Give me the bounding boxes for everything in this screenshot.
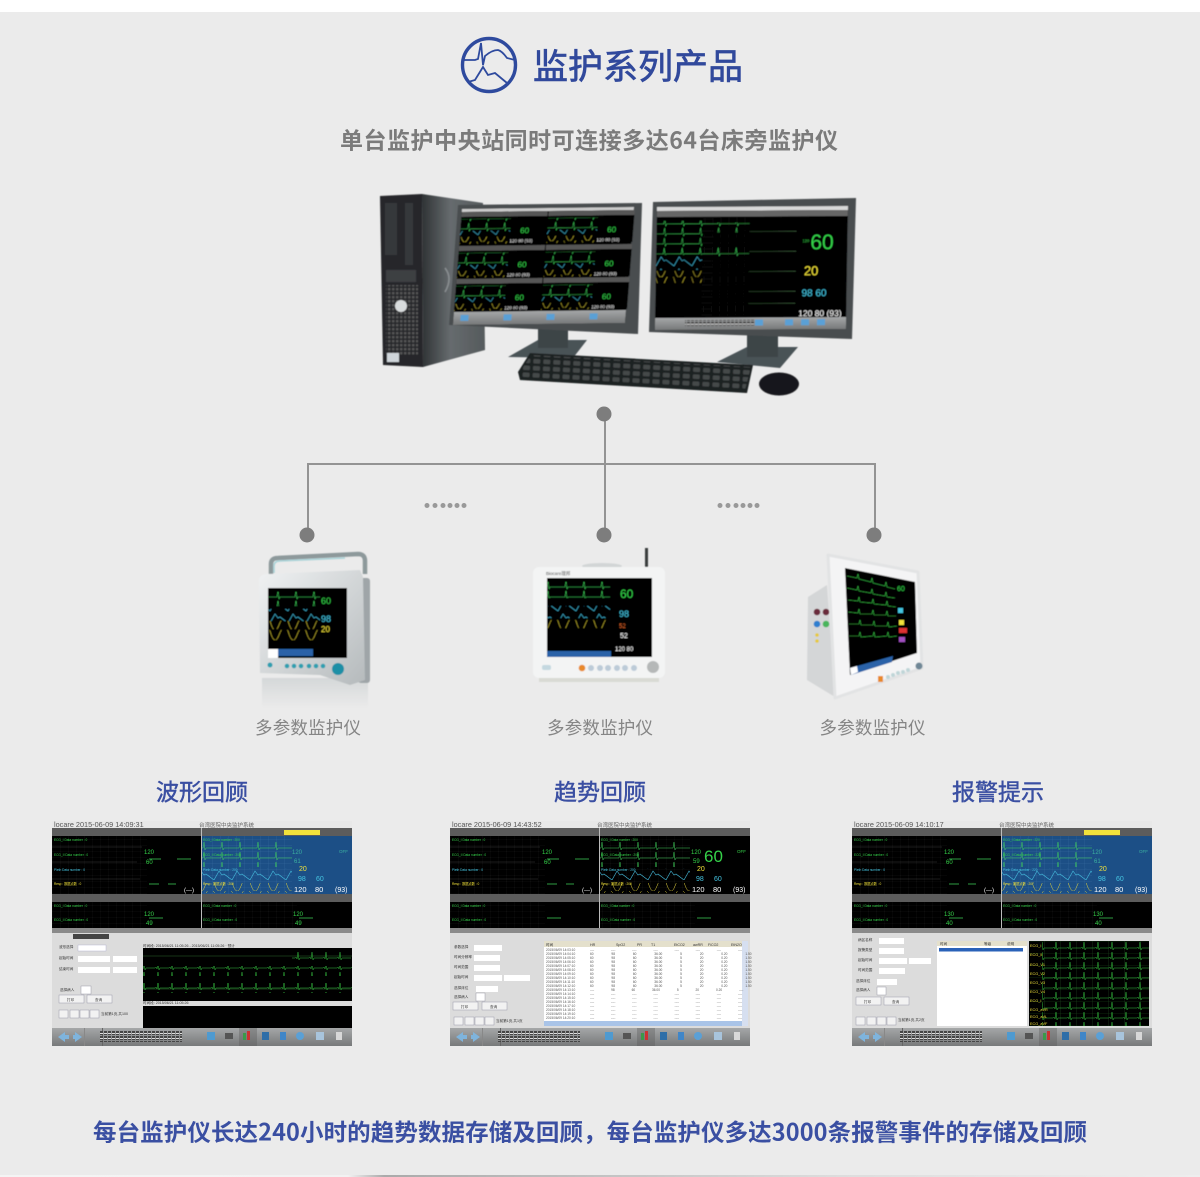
label: monitor 2: 多参数监护仪 bbox=[547, 718, 653, 738]
screenshot: waveform review: 时间段: 2015/06/21 11:05:26 bbox=[143, 1000, 188, 1005]
screenshot: trend review: ---- ---- ---- ---- ---- ---- ---- ---- bbox=[590, 1000, 742, 1004]
bedside monitor 3 bbox=[807, 555, 922, 698]
bedside monitor 3: 60 bbox=[897, 586, 905, 593]
screenshot: trend review: OFF bbox=[737, 849, 746, 854]
heading: alarm prompt: 报警提示 bbox=[952, 773, 1044, 807]
screenshot: trend review: SpO2 bbox=[616, 943, 625, 947]
left monitor: 120 80 (93) bbox=[596, 237, 620, 242]
screenshot: alarm prompt: ECG_II Data number : 0 bbox=[854, 918, 888, 922]
screenshot: trend review: ---- ---- ---- ---- ---- ---- ---- ---- bbox=[590, 992, 742, 996]
screenshot: alarm prompt: (93) bbox=[1135, 887, 1147, 894]
screenshot: waveform review bbox=[52, 820, 352, 1046]
screenshot: alarm prompt: 98 bbox=[1098, 876, 1106, 883]
screenshot: trend review: Pleth Data number : 0 bbox=[452, 868, 483, 872]
screenshot: alarm prompt: ECG_I Data number : 0 bbox=[854, 838, 888, 842]
screenshot: waveform review: ECG_II Data number : 0 bbox=[203, 918, 237, 922]
screenshot: alarm prompt: Resp : 数据点数 : 207 bbox=[1003, 881, 1034, 886]
screenshot: trend review: 59 bbox=[693, 859, 700, 865]
bedside monitor 1: 60 bbox=[321, 596, 331, 606]
screenshot: trend review: 120 bbox=[691, 850, 702, 856]
screenshot: alarm prompt: 61 bbox=[1094, 859, 1101, 865]
screenshot: alarm prompt: OFF bbox=[1139, 849, 1148, 854]
right monitor bbox=[649, 198, 856, 339]
screenshot: trend review: 查询 bbox=[490, 1004, 498, 1009]
left monitor: 120 80 (93) bbox=[509, 238, 533, 243]
screenshot: waveform review: 结束时间 bbox=[59, 966, 74, 971]
right monitor: 120 bbox=[802, 238, 810, 243]
screenshot: trend review: ECG_II Data number : 0 bbox=[601, 918, 635, 922]
screenshot: waveform review: 20 bbox=[299, 866, 307, 873]
screenshot: alarm prompt: ECG_II bbox=[1030, 953, 1042, 957]
screenshot: trend review: ---- ---- ---- ---- ---- ---- ---- ---- bbox=[590, 1008, 742, 1012]
screenshot: trend review: 2015/06/09 14:16:10 bbox=[546, 1000, 575, 1004]
screenshot: trend review: 60 98 60 36.00 5 20 0.20 1.50 bbox=[590, 964, 752, 968]
screenshot: trend review: 60 98 60 36.00 5 20 0.20 1.50 bbox=[590, 980, 752, 984]
screenshot: waveform review: 选择病人 bbox=[60, 987, 75, 992]
screenshot: waveform review: 120 bbox=[292, 850, 303, 856]
screenshot: trend review: 80 bbox=[713, 885, 721, 894]
screenshot: alarm prompt: 60 bbox=[946, 860, 953, 866]
icon: right monitor stand bbox=[717, 333, 798, 368]
left monitor: 60 bbox=[604, 259, 614, 268]
screenshot: trend review: 60 98 60 36.00 5 20 0.20 1.50 bbox=[590, 952, 752, 956]
screenshot: trend review: T1 bbox=[651, 943, 655, 947]
screenshot: waveform review: 时间段: 2015/06/21 11:05:26 - 2015/06/21 11:05:26 · 预计 bbox=[143, 943, 235, 948]
screenshot: alarm prompt: 40 bbox=[1095, 921, 1102, 927]
screenshot: alarm prompt: ECG_I bbox=[1030, 999, 1041, 1003]
screenshot: trend review: ECG_I Data number : 0 bbox=[452, 904, 486, 908]
screenshot: trend review: 选择床位 bbox=[454, 985, 469, 990]
screenshot: trend review: 60 98 60 36.00 5 20 0.20 1.50 bbox=[590, 960, 752, 964]
screenshot: waveform review: 120 bbox=[294, 885, 307, 894]
screenshot: trend review: 2015/06/09 14:09:10 bbox=[546, 972, 575, 976]
screenshot: trend review: 2015/06/09 14:18:10 bbox=[546, 1008, 575, 1012]
screenshot: trend review: 60 98 60 36.00 5 20 0.20 1.50 bbox=[590, 972, 752, 976]
screenshot: waveform review: 120 bbox=[144, 850, 155, 856]
screenshot: waveform review: 起始时间 bbox=[59, 955, 74, 960]
heading: trend review: 趋势回顾 bbox=[554, 773, 646, 807]
screenshot: alarm prompt: ECG_II Data number : 220 bbox=[1003, 853, 1041, 857]
screenshot: waveform review: Pleth Data number : 0 bbox=[54, 868, 85, 872]
screenshot: trend review: EtN2O bbox=[731, 943, 742, 947]
screenshot: alarm prompt: 130 bbox=[944, 912, 955, 918]
screenshot: trend review: 98 bbox=[696, 876, 704, 883]
screenshot: waveform review: OFF bbox=[339, 849, 348, 854]
screenshot: trend review: 120 bbox=[542, 850, 553, 856]
screenshot: trend review: EtCO2 bbox=[674, 943, 685, 947]
screenshot: alarm prompt: ECG_V2 bbox=[1030, 972, 1045, 976]
screenshot: alarm prompt: ECG_I Data number : 0 bbox=[854, 904, 888, 908]
icon: keyboard bbox=[518, 353, 753, 393]
screenshot: trend review: 60 bbox=[544, 860, 551, 866]
screenshot: trend review: 时间范围 bbox=[454, 964, 469, 969]
screenshot: alarm prompt: 时间范围 bbox=[858, 967, 873, 972]
screenshot: alarm prompt: 起始时间 bbox=[858, 957, 873, 962]
screenshot: waveform review: Resp : 数据点数 : 0 bbox=[54, 881, 82, 886]
screenshot: trend review: 2015/06/09 14:08:10 bbox=[546, 968, 575, 972]
label: monitor 1: 多参数监护仪 bbox=[255, 718, 361, 738]
screenshot: alarm prompt: ECG_I Data number : 220 bbox=[1003, 838, 1040, 842]
left monitor: 120 80 (93) bbox=[504, 305, 528, 310]
bedside monitor 2: Biocare理邦 bbox=[546, 570, 571, 577]
screenshot: alarm prompt: locare 2015-06-09 14:10:17 bbox=[854, 820, 944, 829]
screenshot: trend review: 60 98 60 36.00 5 20 0.20 1.50 bbox=[590, 956, 752, 960]
screenshot: waveform review: 120 bbox=[144, 912, 155, 918]
icon: monitor waveform bbox=[462, 38, 516, 92]
screenshot: trend review: 120 bbox=[692, 885, 705, 894]
screenshot: trend review: ECG_II Data number : 0 bbox=[452, 853, 486, 857]
screenshot: trend review: (93) bbox=[733, 887, 745, 894]
screenshot: alarm prompt: 打印 bbox=[864, 999, 872, 1004]
screenshot: waveform review: (---) bbox=[184, 888, 194, 894]
screenshot: trend review: 时间分辨率 bbox=[454, 954, 472, 959]
left monitor: 120 80 (93) bbox=[594, 271, 617, 276]
screenshot: trend review: 60 98 60 36.00 5 20 0.20 1.50 bbox=[590, 968, 752, 972]
right monitor: 98 60 bbox=[801, 288, 827, 299]
left monitor: 60 bbox=[602, 292, 612, 301]
screenshot: trend review: ECG_II Data number : 0 bbox=[452, 918, 486, 922]
bedside monitor 2 bbox=[533, 548, 665, 682]
screenshot: alarm prompt: Pleth Data number : 220 bbox=[1003, 868, 1038, 872]
screenshot: trend review: 2015/06/09 14:03:10 bbox=[546, 948, 575, 952]
screenshot: trend review: 当前第1页,共1页 bbox=[496, 1018, 523, 1023]
screenshot: alarm prompt: 40 bbox=[946, 921, 953, 927]
screenshot: waveform review: 49 bbox=[295, 921, 302, 927]
screenshot: trend review: 选择病人 bbox=[454, 994, 469, 999]
screenshot: trend review: awRR bbox=[693, 943, 703, 947]
screenshot: trend review: ---- ---- ---- ---- ---- ---- ---- ---- bbox=[590, 1004, 742, 1008]
screenshot: alarm prompt bbox=[852, 820, 1152, 1046]
icon: PC tower bbox=[380, 194, 485, 367]
screenshot: trend review: 2015/06/09 14:19:10 bbox=[546, 1012, 575, 1016]
screenshot: waveform review: (93) bbox=[335, 887, 347, 894]
screenshot: alarm prompt: 病区名称 bbox=[858, 937, 873, 942]
screenshot: trend review: 参数选择 bbox=[454, 944, 469, 949]
screenshot: alarm prompt: 20 bbox=[1099, 866, 1107, 873]
right monitor: 120 80 (93) bbox=[798, 308, 842, 318]
screenshot: alarm prompt: ECG_V3 bbox=[1030, 981, 1045, 985]
screenshot: waveform review: ECG_I Data number : 0 bbox=[203, 904, 237, 908]
screenshot: trend review: Resp : 数据点数 : 200 bbox=[601, 881, 632, 886]
screenshot: trend review: 2015/06/09 14:06:10 bbox=[546, 960, 575, 964]
screenshot: trend review: ECG_II Data number : 200 bbox=[601, 853, 639, 857]
screenshot: waveform review: ECG_I Data number : 200 bbox=[203, 838, 240, 842]
screenshot: alarm prompt: 时间 bbox=[940, 941, 948, 946]
screenshot: trend review: ECG_I Data number : 0 bbox=[452, 838, 486, 842]
right monitor: 60 bbox=[810, 231, 834, 254]
screenshot: trend review: ---- ---- ---- ---- ---- ---- ---- ---- bbox=[590, 1012, 742, 1016]
screenshot: trend review: (---) bbox=[582, 888, 592, 894]
screenshot: waveform review: 60 bbox=[146, 860, 153, 866]
screenshot: trend review: ECG_I Data number : 0 bbox=[601, 904, 635, 908]
screenshot: trend review: Resp : 数据点数 : 0 bbox=[452, 881, 480, 886]
screenshot: trend review: ---- ---- ---- ---- ---- ---- ---- ---- bbox=[590, 1016, 742, 1020]
left monitor: 60 bbox=[517, 260, 527, 269]
screenshot: waveform review: Pleth Data number : 200 bbox=[203, 868, 238, 872]
screenshot: trend review: 2015/06/09 14:04:10 bbox=[546, 952, 575, 956]
screenshot: alarm prompt: ECG_aVF bbox=[1030, 1022, 1048, 1026]
screenshot: waveform review: locare 2015-06-09 14:09:31 bbox=[54, 820, 144, 829]
screenshot: trend review: 2015/06/09 14:13:10 bbox=[546, 988, 575, 992]
screenshot: alarm prompt: 报警类型 bbox=[858, 947, 873, 952]
heading: waveform review: 波形回顾 bbox=[156, 773, 248, 807]
screenshot: trend review: FiCO2 bbox=[708, 943, 718, 947]
screenshot: alarm prompt: 说明 bbox=[1007, 941, 1015, 946]
screenshot: alarm prompt: 60 bbox=[1116, 876, 1124, 883]
screenshot: alarm prompt: ECG_aVL bbox=[1030, 1015, 1047, 1019]
central station computer bbox=[380, 194, 856, 396]
screenshot: trend review: ---- ---- ---- ---- ---- ---- ---- ---- bbox=[590, 948, 742, 952]
screenshot: alarm prompt: Resp : 数据点数 : 0 bbox=[854, 881, 882, 886]
screenshot: trend review: 台湾医院中央监护系统 bbox=[597, 821, 653, 829]
screenshot: alarm prompt: Pleth Data number : 0 bbox=[854, 868, 885, 872]
screenshot: trend review: ---- 98 60 36.00 5 20 0.20 ---- bbox=[590, 988, 743, 992]
screenshot: waveform review: 查询 bbox=[95, 997, 103, 1002]
screenshot: alarm prompt: 120 bbox=[1094, 885, 1107, 894]
screenshot: waveform review: ECG_II Data number : 200 bbox=[203, 853, 241, 857]
icon: left monitor stand bbox=[508, 328, 587, 358]
connector lines bbox=[300, 406, 882, 542]
screenshot: trend review: 2015/06/09 14:17:10 bbox=[546, 1004, 575, 1008]
screenshot: trend review: ECG_I Data number : 200 bbox=[601, 838, 638, 842]
screenshot: waveform review: 60 bbox=[316, 876, 324, 883]
screenshot: alarm prompt: ECG_V1 bbox=[1030, 963, 1045, 967]
screenshot: alarm prompt: ECG_I Data number : 0 bbox=[1003, 904, 1037, 908]
screenshot: waveform review: 打印 bbox=[67, 997, 75, 1002]
left monitor: 60 bbox=[520, 226, 530, 235]
screenshot: alarm prompt: 选择病人 bbox=[856, 987, 871, 992]
label: monitor 3: 多参数监护仪 bbox=[820, 718, 926, 738]
screenshot: alarm prompt: ECG_II Data number : 0 bbox=[1003, 918, 1037, 922]
screenshot: alarm prompt: 120 bbox=[944, 850, 955, 856]
screenshot: waveform review: ECG_I Data number : 0 bbox=[54, 904, 88, 908]
screenshot: trend review: Pleth Data number : 200 bbox=[601, 868, 636, 872]
screenshot: waveform review: Resp : 数据点数 : 200 bbox=[203, 881, 234, 886]
screenshot: trend review bbox=[450, 820, 752, 1046]
screenshot: trend review: 20 bbox=[697, 866, 705, 873]
screenshot: alarm prompt: 等级 bbox=[984, 941, 992, 946]
left monitor: 60 bbox=[607, 225, 617, 234]
screenshot: trend review: 2015/06/09 14:11:10 bbox=[546, 980, 575, 984]
screenshot: trend review: locare 2015-06-09 14:43:52 bbox=[452, 820, 542, 829]
left monitor bbox=[449, 203, 642, 334]
screenshot: trend review: 60 98 60 36.00 5 20 0.20 1.50 bbox=[590, 984, 752, 988]
screenshot: trend review: 起始时间 bbox=[454, 974, 469, 979]
bedside monitor 2: 52 bbox=[619, 624, 626, 630]
screenshot: alarm prompt: 查询 bbox=[892, 999, 900, 1004]
screenshot: trend review: HR bbox=[590, 943, 596, 947]
screenshot: alarm prompt: ECG_I bbox=[1030, 944, 1041, 948]
screenshot: trend review: ---- ---- ---- ---- ---- ---- ---- ---- bbox=[590, 996, 742, 1000]
screenshot: trend review: 2015/06/09 14:15:10 bbox=[546, 996, 575, 1000]
screenshot: trend review: 2015/06/09 14:05:10 bbox=[546, 956, 575, 960]
bedside monitor 2: 98 bbox=[619, 609, 629, 619]
screenshot: trend review: 60 bbox=[704, 847, 723, 866]
icon: mouse bbox=[759, 372, 799, 396]
screenshot: alarm prompt: ECG_II Data number : 0 bbox=[854, 853, 888, 857]
left monitor: 120 80 (93) bbox=[591, 304, 615, 309]
screenshot: trend review: 打印 bbox=[461, 1004, 469, 1009]
title: 监护系列产品 bbox=[533, 39, 743, 90]
bedside monitor 1: 98 bbox=[321, 614, 331, 624]
footer statement: 每台监护仪长达240小时的趋势数据存储及回顾，每台监护仪多达3000条报警事件的存储及回顾 bbox=[93, 1114, 1087, 1148]
screenshot: alarm prompt: 120 bbox=[1092, 850, 1103, 856]
screenshot: waveform review: ECG_II Data number : 0 bbox=[54, 918, 88, 922]
left monitor: 120 80 (93) bbox=[507, 272, 530, 277]
screenshot: waveform review: 49 bbox=[146, 921, 153, 927]
screenshot: alarm prompt: 80 bbox=[1115, 885, 1123, 894]
screenshot: waveform review: ECG_I Data number : 0 bbox=[54, 838, 88, 842]
screenshot: waveform review: 120 bbox=[293, 912, 304, 918]
screenshot: waveform review: 台湾医院中央监护系统 bbox=[199, 821, 255, 829]
screenshot: alarm prompt: ECG_aVR bbox=[1030, 1008, 1048, 1012]
screenshot: trend review: 2015/06/09 14:20:10 bbox=[546, 1016, 575, 1020]
screenshot: alarm prompt: ECG_V4 bbox=[1030, 990, 1045, 994]
screenshot: trend review: PR bbox=[637, 943, 642, 947]
screenshot: waveform review: 80 bbox=[315, 885, 323, 894]
screenshot: trend review: 时间 bbox=[546, 942, 554, 947]
right monitor: 20 bbox=[804, 263, 818, 278]
screenshot: waveform review: 98 bbox=[298, 876, 306, 883]
screenshot: alarm prompt: (---) bbox=[984, 888, 994, 894]
screenshot: trend review: 2015/06/09 14:12:10 bbox=[546, 984, 575, 988]
screenshot: waveform review: 61 bbox=[294, 859, 301, 865]
screenshot: alarm prompt: 选择床位 bbox=[856, 978, 871, 983]
screenshot: waveform review: ECG_II Data number : 0 bbox=[54, 853, 88, 857]
screenshot: alarm prompt: 130 bbox=[1093, 912, 1104, 918]
screenshot: waveform review: 当前第1页,共100 bbox=[101, 1011, 128, 1016]
subtitle: 单台监护中央站同时可连接多达64台床旁监护仪 bbox=[340, 122, 838, 156]
screenshot: trend review: 60 bbox=[714, 876, 722, 883]
screenshot: trend review: 2015/06/09 14:14:10 bbox=[546, 992, 575, 996]
screenshot: alarm prompt: 当前第1页,共2页 bbox=[898, 1017, 925, 1022]
screenshot: alarm prompt: 台湾医院中央监护系统 bbox=[999, 821, 1055, 829]
screenshot: waveform review: 波形选择 bbox=[59, 944, 74, 949]
screenshot: trend review: 2015/06/09 14:10:10 bbox=[546, 976, 575, 980]
screenshot: trend review: 60 98 60 36.00 5 20 0.20 1.50 bbox=[590, 976, 752, 980]
left monitor: 60 bbox=[515, 293, 525, 302]
bedside monitor 1 bbox=[259, 554, 370, 708]
bedside monitor 1: 20 bbox=[321, 625, 330, 634]
bedside monitor 2: 52 bbox=[620, 633, 628, 640]
screenshot: trend review: 2015/06/09 14:07:10 bbox=[546, 964, 575, 968]
bedside monitor 2: 60 bbox=[620, 587, 634, 601]
bedside monitor 2: 120 80 bbox=[615, 647, 634, 653]
